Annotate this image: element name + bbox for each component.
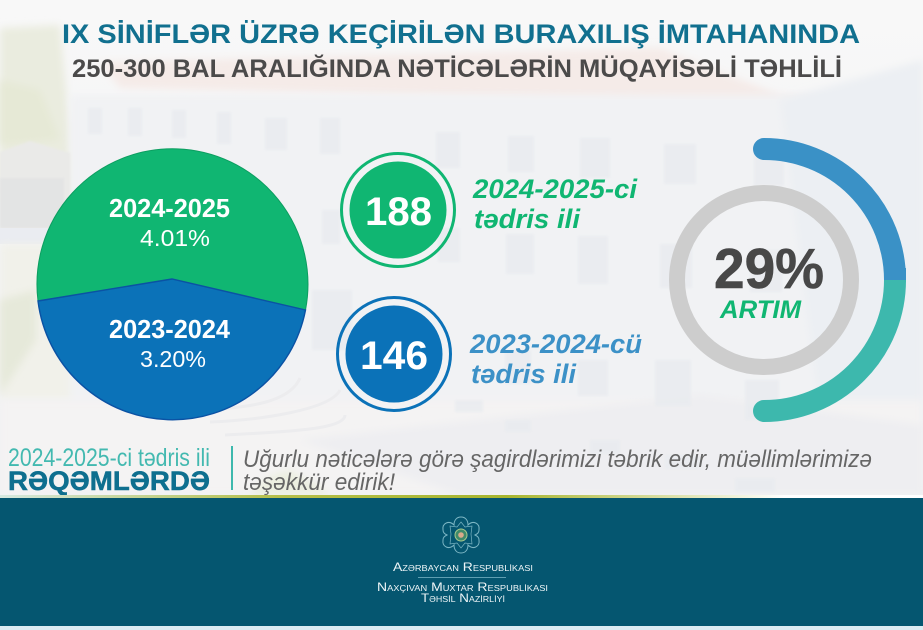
pie label: 2024-2025: 2024-2025 bbox=[109, 193, 230, 223]
bottom left heading bbox=[8, 444, 210, 496]
label: 2023-2024-cü tədris ili: tədris ili bbox=[471, 359, 577, 389]
icon: ministry emblem bbox=[443, 517, 479, 553]
badge: 146 bbox=[338, 298, 450, 410]
label: 2023-2024-cü tədris ili: 2023-2024-cü bbox=[469, 329, 643, 359]
congratulation message: Uğurlu nəticələrə görə şagirdlərimizi təbrik edir, müəllimlərimizə bbox=[243, 446, 872, 473]
badge: 188: 188 bbox=[365, 190, 432, 234]
gauge: blue upper arc bbox=[764, 149, 895, 280]
footer text: Azərbaycan Respublikası: Azərbaycan Respublikası bbox=[393, 560, 533, 574]
background: faded building photo bbox=[0, 0, 923, 496]
pie label: 2023-2024: 2023-2024 bbox=[109, 314, 231, 344]
footer text: Təhsil Nazirliyi: Təhsil Nazirliyi bbox=[421, 591, 505, 605]
congratulation message: təşəkkür edirik! bbox=[243, 469, 395, 496]
gauge value: 29%: 29% bbox=[714, 237, 824, 301]
label: 2024-2025-ci tədris ili bbox=[472, 174, 637, 234]
pie label: 2024-2025: 4.01% bbox=[140, 225, 210, 251]
pie label: 2024-2025 bbox=[109, 193, 230, 251]
pie label: 2023-2024: 3.20% bbox=[140, 346, 206, 372]
subtitle: 250-300 BAL ARALIĞINDA NƏTİCƏLƏRİN MÜQAYİSƏLİ TƏHLİLİ bbox=[72, 54, 842, 83]
growth gauge bbox=[677, 149, 906, 411]
pie slice: 2024-2025 green bbox=[37, 149, 308, 310]
gauge label: ARTIM: ARTIM bbox=[719, 296, 802, 324]
badge: 188 bbox=[342, 154, 454, 266]
label: 2024-2025-ci tədris ili: tədris ili bbox=[474, 204, 581, 234]
congratulation message bbox=[243, 446, 872, 496]
pie chart bbox=[37, 149, 308, 420]
gauge: grey inner ring bbox=[677, 193, 851, 367]
bottom left heading: RƏQƏMLƏRDƏ bbox=[8, 466, 210, 496]
pie slice: 2023-2024 blue bbox=[38, 279, 306, 420]
badge: 146: 146 bbox=[360, 334, 428, 378]
footer band bbox=[0, 498, 923, 630]
bottom left heading: 2024-2025-ci tədris ili bbox=[8, 444, 210, 472]
gauge: teal lower arc bbox=[764, 280, 895, 411]
title: IX SİNİFLƏR ÜZRƏ KEÇİRİLƏN BURAXILIŞ İMTAHANINDA bbox=[62, 19, 860, 49]
pie label: 2023-2024 bbox=[109, 314, 231, 372]
label: 2023-2024-cü tədris ili bbox=[469, 329, 643, 389]
footer text: Naxçıvan Muxtar Respublikası: Naxçıvan Muxtar Respublikası bbox=[377, 580, 548, 594]
label: 2024-2025-ci tədris ili: 2024-2025-ci bbox=[472, 174, 637, 204]
